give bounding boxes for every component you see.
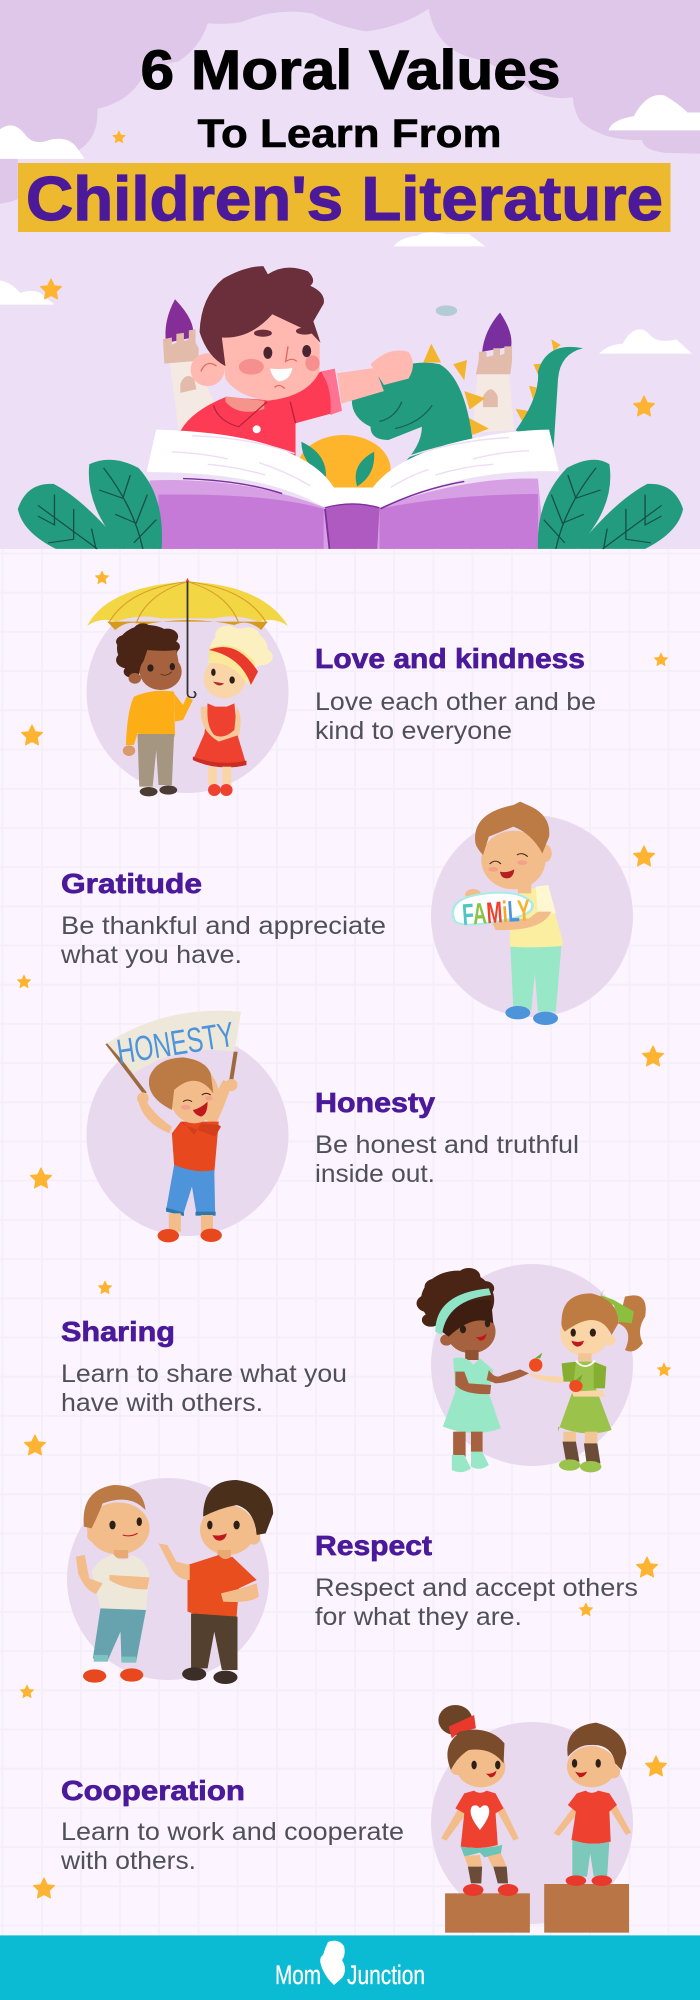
gratitude heading: Gratitude xyxy=(61,868,202,899)
respect body xyxy=(315,1574,638,1631)
honesty body: inside out. xyxy=(315,1160,435,1188)
cooperation heading: Cooperation xyxy=(61,1775,245,1806)
family sign lettering: FAMiLY xyxy=(461,894,531,932)
honesty heading: Honesty xyxy=(315,1087,435,1118)
gratitude body: what you have. xyxy=(60,941,242,969)
sharing body: have with others. xyxy=(61,1389,263,1417)
respect body: Respect and accept others xyxy=(315,1574,638,1602)
love heading: Love and kindness xyxy=(315,643,585,674)
sharing body: Learn to share what you xyxy=(61,1360,347,1388)
love body xyxy=(315,688,596,745)
section: love and kindness xyxy=(86,578,596,796)
honesty body: Be honest and truthful xyxy=(315,1131,579,1159)
sharing body xyxy=(61,1360,347,1417)
section: gratitude xyxy=(60,802,633,1025)
sun xyxy=(297,435,391,504)
illustration: boy with honesty banner xyxy=(107,1011,241,1242)
gratitude circle xyxy=(431,815,633,1017)
love circle xyxy=(86,591,288,793)
section: honesty xyxy=(86,1011,579,1242)
logo: MomJunction xyxy=(275,1941,425,1990)
panel: header illustration xyxy=(0,0,700,549)
dinosaur xyxy=(352,339,583,468)
title line two: To Learn From xyxy=(198,112,502,156)
right castle tower xyxy=(472,312,514,433)
cooperation body xyxy=(60,1818,404,1875)
sharing heading: Sharing xyxy=(61,1316,175,1347)
sharing circle xyxy=(431,1264,633,1466)
gratitude body xyxy=(60,912,386,969)
gratitude body: Be thankful and appreciate xyxy=(61,912,386,940)
respect body: for what they are. xyxy=(315,1603,522,1631)
logo mother figure xyxy=(320,1941,345,1985)
illustration: boy with family sign xyxy=(453,802,563,1025)
illustration: children on boxes xyxy=(438,1705,631,1933)
honesty body xyxy=(315,1131,579,1188)
illustration: children under umbrella xyxy=(87,578,288,796)
white clouds xyxy=(0,95,700,354)
footer bar xyxy=(0,1935,700,2000)
grey pebble xyxy=(436,305,457,316)
title highlight: Children's Literature xyxy=(26,165,663,234)
love body: kind to everyone xyxy=(315,717,512,745)
boy reading xyxy=(179,266,413,457)
middle leaves xyxy=(301,442,374,486)
logo: MomJunction: Junction xyxy=(347,1960,425,1990)
title line one: 6 Moral Values xyxy=(140,38,560,101)
title xyxy=(18,38,670,234)
cooperation body: with others. xyxy=(60,1847,196,1875)
page background with grid xyxy=(0,548,700,2000)
section: cooperation xyxy=(60,1705,633,1933)
illustration: girls sharing an apple xyxy=(417,1268,646,1472)
big leaves left and right xyxy=(18,460,683,549)
left castle tower xyxy=(163,299,215,430)
section: respect xyxy=(67,1478,638,1684)
illustration: two boys talking xyxy=(76,1480,273,1684)
open book xyxy=(146,430,559,549)
section: sharing xyxy=(61,1264,646,1472)
respect circle xyxy=(67,1478,269,1680)
cooperation body: Learn to work and cooperate xyxy=(61,1818,404,1846)
respect heading: Respect xyxy=(315,1530,432,1561)
logo: MomJunction: Mom xyxy=(275,1960,321,1990)
honesty banner lettering: HONESTY xyxy=(114,1015,237,1072)
cooperation circle xyxy=(431,1722,633,1924)
dark clouds across the top xyxy=(0,0,700,204)
love body: Love each other and be xyxy=(315,688,596,716)
honesty circle xyxy=(86,1034,288,1236)
